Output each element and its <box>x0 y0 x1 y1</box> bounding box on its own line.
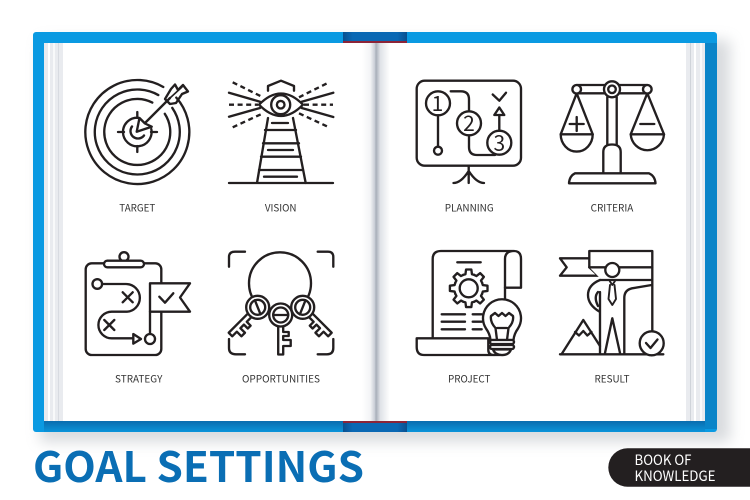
label: criteria: CRITERIA <box>591 200 634 215</box>
book <box>33 32 730 442</box>
badge: book of knowledge: KNOWLEDGE <box>634 466 716 486</box>
icon: scroll with gear and light bulb <box>417 251 521 355</box>
label: strategy: STRATEGY <box>115 371 163 386</box>
label: vision: VISION <box>265 200 297 215</box>
label: target: TARGET <box>119 200 155 215</box>
panel: opportunities <box>222 252 338 386</box>
light bulb <box>483 299 521 355</box>
panel: strategy <box>86 252 190 386</box>
gear <box>450 270 488 307</box>
panel: vision <box>229 81 333 215</box>
key: centre <box>269 304 292 354</box>
panel: target <box>85 80 189 215</box>
left page <box>44 43 377 421</box>
label: opportunities: OPPORTUNITIES <box>242 371 320 386</box>
icon: clipboard with route and flag <box>86 252 190 355</box>
panel: project <box>417 251 521 386</box>
icon: businessman with flag, mountain and check <box>560 251 664 355</box>
panel: result <box>560 251 664 386</box>
icon: lighthouse with eye <box>229 81 333 183</box>
spine bottom <box>343 421 407 432</box>
icon: presentation board with numbered steps: 2 <box>463 108 475 138</box>
badge: book of knowledge: BOOK OF <box>634 450 692 470</box>
label: planning: PLANNING <box>445 200 494 215</box>
panel: planning <box>417 81 521 215</box>
icon: presentation board with numbered steps <box>417 81 521 183</box>
badge: book of knowledge <box>608 448 750 487</box>
panel: criteria <box>561 81 664 215</box>
icon: balance scales <box>561 81 664 183</box>
key: left <box>222 291 274 343</box>
label: result: RESULT <box>594 371 630 386</box>
spine top <box>343 32 407 43</box>
icon: presentation board with numbered steps: 3 <box>493 128 505 158</box>
icon: target with arrow <box>85 80 189 184</box>
title: GOAL SETTINGS <box>33 434 364 495</box>
book cover <box>33 32 717 432</box>
label: project: PROJECT <box>448 371 490 386</box>
icon: presentation board with numbered steps: 1 <box>432 88 443 118</box>
key: right <box>286 291 338 343</box>
icon: bunch of keys <box>222 252 338 354</box>
right page <box>376 43 705 421</box>
